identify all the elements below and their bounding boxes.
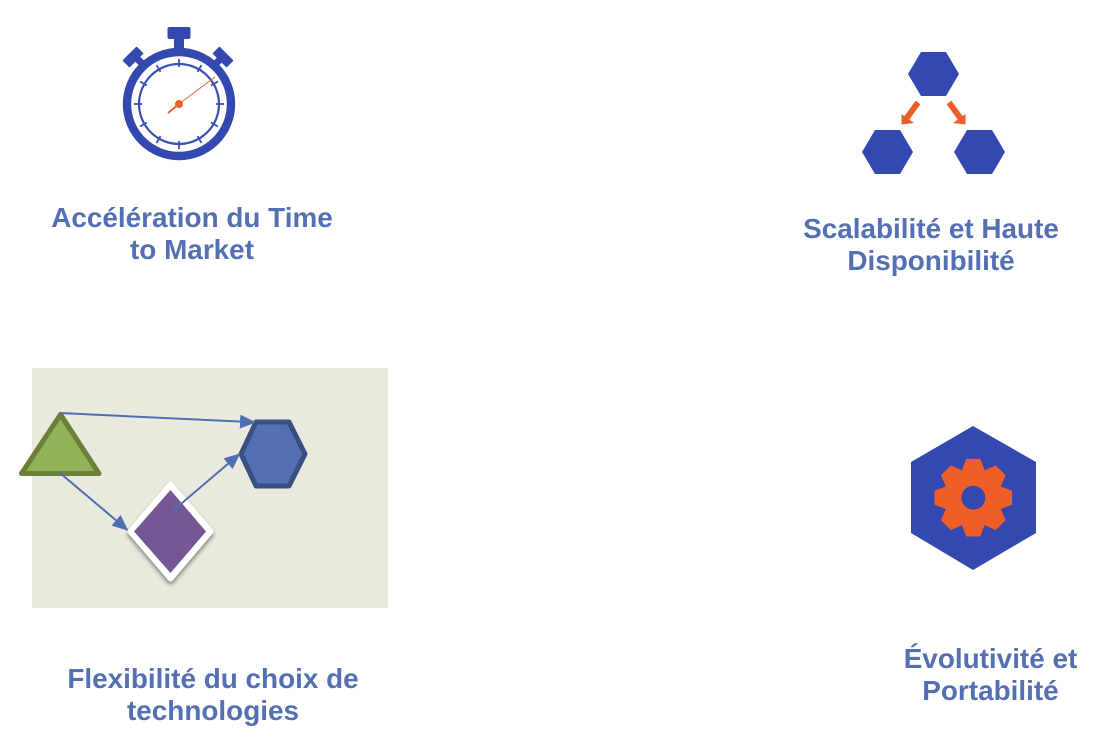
- heading: evolutivity: Portabilité: [922, 675, 1059, 706]
- heading: flexibility: Flexibilité du choix de: [67, 663, 359, 694]
- icon: purple diamond: [130, 484, 211, 579]
- icon: stopwatch: [122, 27, 234, 156]
- heading: evolutivity: Évolutivité et: [904, 643, 1077, 674]
- heading: scalability: Scalabilité et Haute: [803, 213, 1059, 244]
- icon: green triangle: [22, 414, 99, 474]
- heading: acceleration: Accélération du Time: [51, 202, 333, 233]
- arrow: triangle to hexagon: [60, 413, 255, 422]
- heading: acceleration: to Market: [130, 234, 254, 265]
- heading: flexibility: technologies: [127, 695, 299, 726]
- panel: technology flexibility diagram: [22, 368, 388, 608]
- icon: gear in hexagon: [911, 426, 1036, 570]
- heading: scalability: Disponibilité: [847, 245, 1015, 276]
- icon: scaling hexagons: [862, 52, 1005, 174]
- arrow: triangle to diamond: [60, 473, 128, 530]
- arrow: diamond to hexagon: [173, 454, 240, 511]
- icon: blue hexagon: [241, 422, 305, 486]
